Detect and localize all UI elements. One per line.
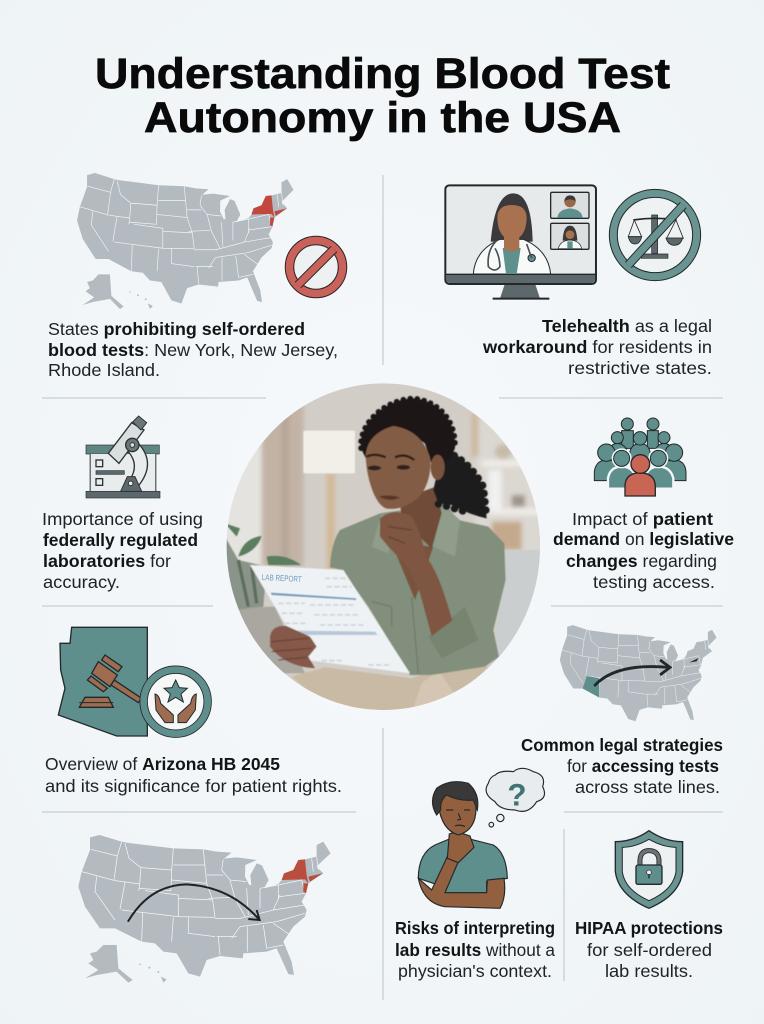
icon: microscope laboratory [86, 416, 160, 498]
text: risks of interpreting: lab results without a [395, 940, 555, 960]
text: prohibiting states: blood tests: New York, New Jersey, [48, 340, 338, 360]
text: patient demand: demand on legislative [553, 529, 734, 549]
title [95, 50, 670, 142]
text: federally regulated laboratories: Importance of using [42, 509, 203, 529]
text: legal strategies [521, 735, 723, 797]
text: Arizona HB 2045 [45, 754, 342, 796]
icon: HIPAA shield and lock [615, 831, 683, 908]
text: prohibiting states: States prohibiting self-ordered [48, 319, 305, 339]
photo: woman reading lab report [225, 380, 545, 715]
text: patient demand: testing access. [593, 572, 715, 592]
icon: thinking man with question bubble [418, 768, 545, 908]
icon: prohibition sign [290, 240, 342, 294]
icon: thinking man with question bubble: ? [507, 777, 526, 812]
icon: no legal scales [613, 193, 697, 277]
text: telehealth: restrictive states. [568, 358, 712, 378]
text: patient demand: Impact of patient [572, 509, 713, 529]
text: HIPAA protections: HIPAA protections [575, 918, 723, 938]
text: risks of interpreting: physician's context. [398, 961, 552, 981]
doctor [473, 193, 551, 274]
text: federally regulated laboratories: accuracy. [43, 572, 120, 592]
text: HIPAA protections [575, 918, 723, 981]
photo: woman reading lab report: LAB REPORT [262, 572, 302, 584]
text: federally regulated laboratories: federally regulated [43, 530, 198, 550]
text: risks of interpreting [395, 918, 555, 981]
text: prohibiting states [48, 319, 338, 380]
shirt [330, 504, 506, 675]
face [366, 426, 430, 509]
title: Understanding Blood Test [95, 50, 670, 98]
icon: Arizona gavel and patient rights [58, 627, 208, 736]
text: prohibiting states: Rhode Island. [48, 360, 160, 380]
title: Autonomy in the USA [144, 94, 621, 142]
text: telehealth [482, 316, 712, 378]
text: risks of interpreting: Risks of interpreting [395, 918, 555, 938]
map: Arizona to other states [560, 625, 717, 721]
text: Arizona HB 2045: Overview of Arizona HB 2045 [45, 754, 280, 774]
text: Arizona HB 2045: and its significance for patient rights. [45, 776, 342, 796]
text: legal strategies: for accessing tests [567, 756, 719, 776]
icon: telehealth monitor [445, 185, 596, 299]
hand at chin and forearm [380, 512, 452, 636]
text: legal strategies: Common legal strategies [521, 735, 723, 755]
map: cross-state arrow [78, 835, 331, 983]
text: telehealth: workaround for residents in [482, 337, 712, 357]
text: HIPAA protections: for self-ordered [587, 940, 712, 960]
map: prohibiting states [77, 173, 294, 309]
text: patient demand [553, 509, 734, 592]
neck [400, 487, 442, 548]
text: legal strategies: across state lines. [575, 777, 720, 797]
text: federally regulated laboratories [42, 509, 203, 592]
left hand [270, 626, 317, 668]
icon: patient demand crowd [594, 418, 686, 496]
text: telehealth: Telehealth as a legal [542, 316, 712, 336]
ponytail and hair [433, 448, 487, 518]
text: federally regulated laboratories: laboratories for [43, 551, 171, 571]
lab report paper [250, 565, 410, 673]
text: HIPAA protections: lab results. [605, 961, 693, 981]
text: patient demand: changes regarding [566, 551, 717, 571]
